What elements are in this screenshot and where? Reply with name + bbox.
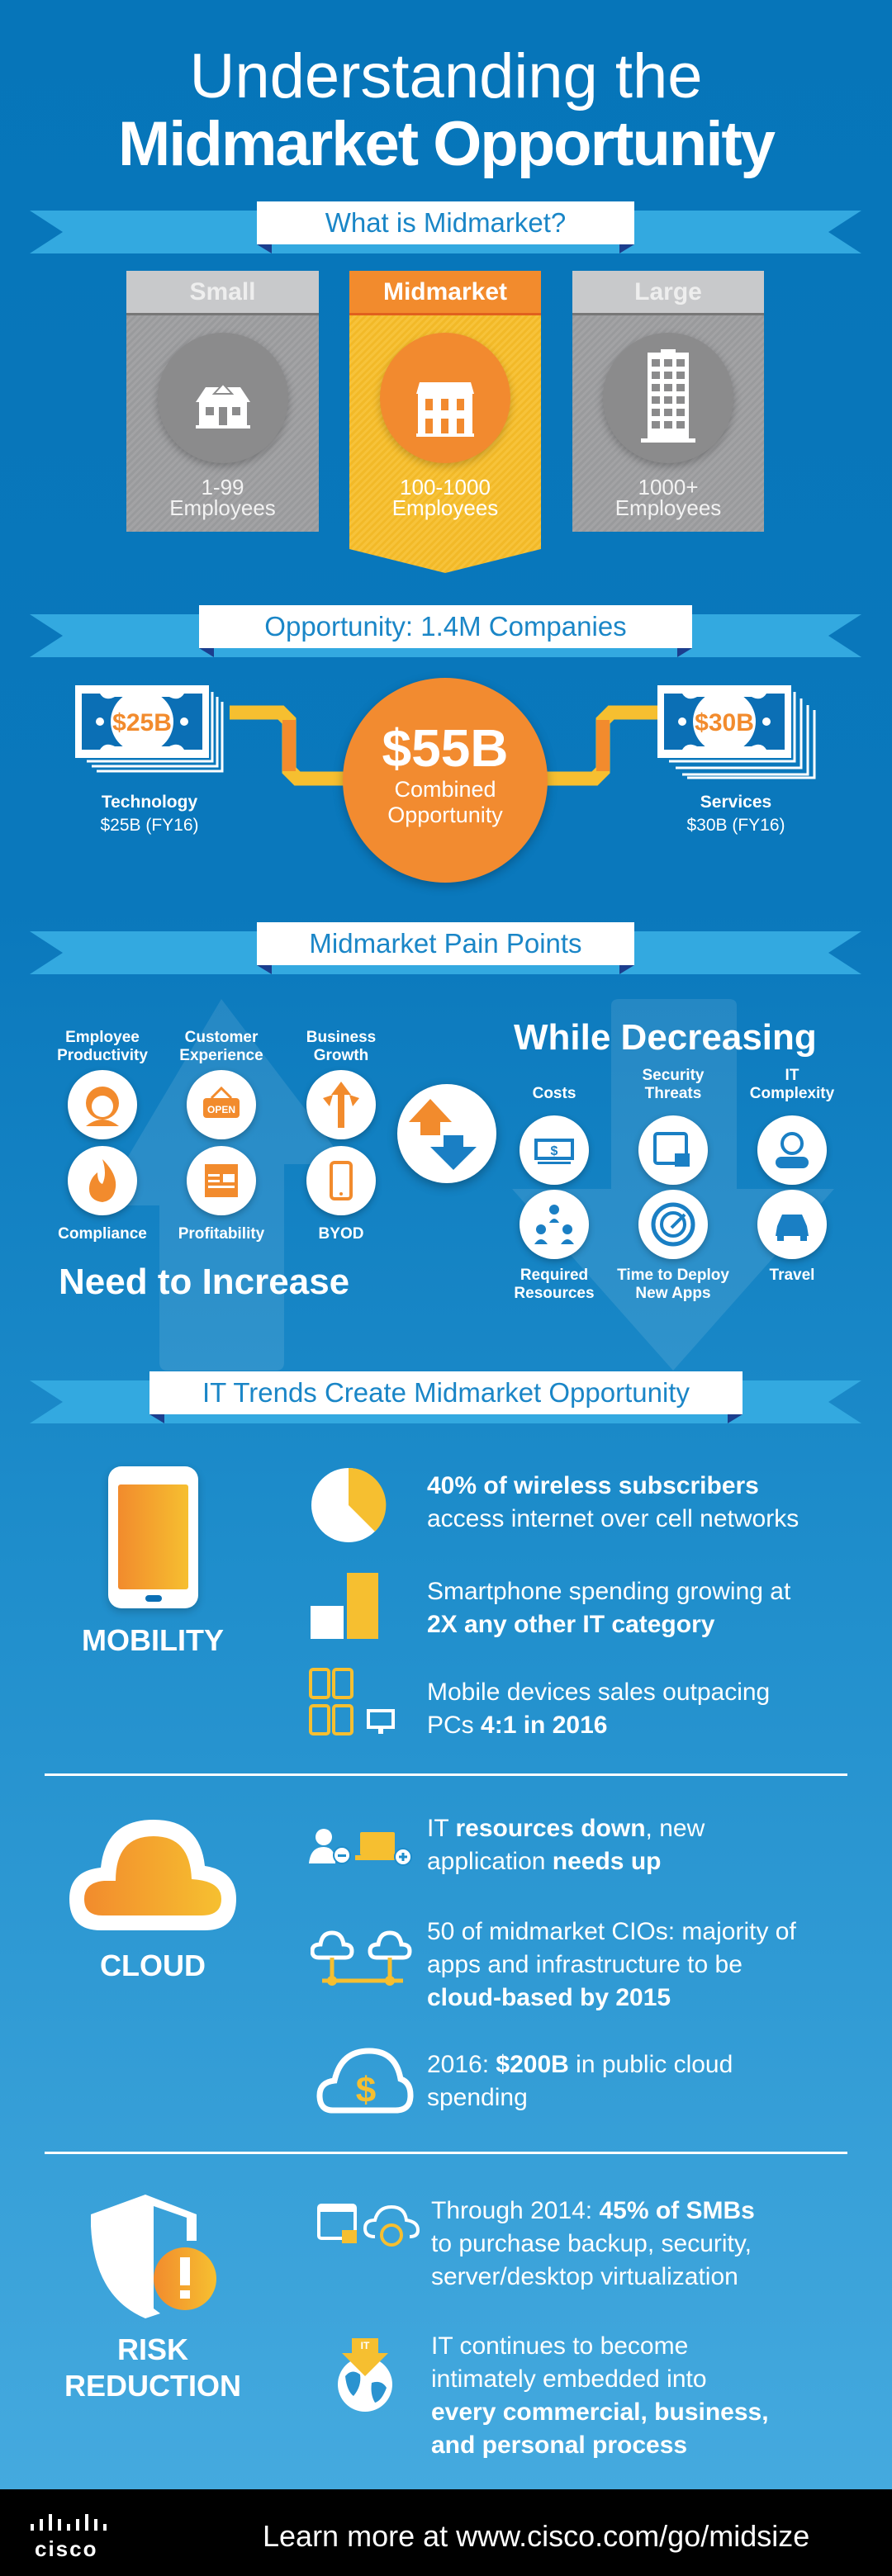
panel: decreasing icons: Complexity	[750, 1085, 834, 1102]
text: 50 of midmarket CIOs: cloud-based by 2015	[427, 1984, 671, 2011]
icon: globe IT: IT	[361, 2340, 370, 2351]
footer	[0, 2489, 892, 2576]
panel: large: Employees	[615, 495, 721, 520]
icon: employee	[68, 1070, 137, 1139]
circle: combined opportunity	[343, 678, 548, 883]
text: IT embedded: intimately embedded into	[431, 2365, 707, 2393]
icon: house	[158, 333, 288, 463]
panel: decreasing icons: IT	[785, 1067, 799, 1084]
panel: decreasing icons: Security	[643, 1067, 704, 1084]
heading: risk reduction: RISK	[117, 2332, 188, 2366]
text: services: $30B (FY16)	[686, 816, 785, 835]
icon: money stack 25B	[75, 685, 223, 773]
icon: money stack 30B: $30B	[695, 709, 754, 736]
icon: cloud	[69, 1820, 236, 1930]
text: smartphone spending	[427, 1578, 791, 1638]
icon: open sign: OPEN	[207, 1104, 235, 1115]
circle: combined opportunity: Combined	[394, 777, 496, 802]
heading: risk reduction	[64, 2332, 241, 2403]
icon: speedometer	[638, 1190, 708, 1259]
text: mobile devices: Mobile devices sales outpacing	[427, 1679, 770, 1706]
icon: costs	[520, 1115, 589, 1185]
logo: cisco: cisco	[35, 2536, 97, 2561]
text: services: Services	[700, 793, 771, 812]
icon: money stack 30B	[657, 685, 816, 779]
icon: dollar cloud: $	[356, 2070, 376, 2110]
panel: small: Small	[189, 278, 256, 305]
heading: while decreasing: While Decreasing	[514, 1017, 817, 1058]
connectors	[230, 705, 657, 786]
text: wireless: access internet over cell networks	[427, 1505, 799, 1532]
text: 2016 public cloud: 2016: $200B in public cloud	[427, 2051, 733, 2078]
panel: decreasing icons	[514, 1067, 834, 1302]
icon: travel car	[757, 1190, 827, 1259]
text: technology	[100, 793, 199, 835]
text: through 2014	[431, 2197, 755, 2290]
panel: decreasing icons: Resources	[514, 1285, 595, 1302]
panel: decreasing icons: Required	[520, 1267, 588, 1284]
text: wireless: 40% of wireless subscribers	[427, 1472, 759, 1499]
text: IT embedded	[431, 2332, 769, 2459]
icon: complexity	[757, 1115, 827, 1185]
panel: midmarket: 100-1000	[400, 475, 491, 500]
circle: combined opportunity: $55B	[382, 718, 509, 778]
icon: pie chart	[311, 1468, 387, 1542]
panel: need to increase: Customer	[185, 1029, 258, 1046]
icon: building	[380, 333, 510, 463]
text: mobile devices: PCs 4:1 in 2016	[427, 1712, 607, 1739]
text: learn more: Learn more at www.cisco.com/go/midsize	[263, 2519, 809, 2553]
icon: up/down arrow circle	[397, 1084, 496, 1183]
panel: large: 1000+	[638, 475, 699, 500]
arrow: faint up arrow	[127, 999, 834, 1371]
ribbon: what is midmarket: What is Midmarket?	[325, 207, 566, 238]
text: smartphone spending: 2X any other IT category	[427, 1611, 714, 1638]
icon: devices	[309, 1668, 395, 1735]
text: 2016 public cloud	[427, 2051, 733, 2111]
panel: decreasing icons: New Apps	[635, 1285, 711, 1302]
heading: need to increase: Need to Increase	[59, 1262, 349, 1302]
text: mobile devices	[427, 1679, 770, 1739]
icon: byod phone	[306, 1146, 376, 1215]
icon: security and backup	[317, 2204, 420, 2247]
icon: costs: $	[551, 1144, 558, 1158]
text: 50 of midmarket CIOs	[427, 1918, 796, 2011]
circle: combined opportunity: Opportunity	[387, 803, 503, 827]
panel: midmarket: Midmarket	[383, 278, 507, 305]
panel: large: Large	[634, 278, 702, 305]
panel: need to increase: Business	[306, 1029, 376, 1046]
icon: connected clouds	[311, 1930, 411, 1986]
icon: skyscraper	[603, 333, 733, 463]
text: IT resources: IT resources down, new	[427, 1815, 705, 1842]
panel: small: Employees	[169, 495, 276, 520]
panel: small	[126, 271, 319, 532]
panel: midmarket	[349, 271, 541, 573]
panel: need to increase: BYOD	[319, 1225, 363, 1243]
text: 50 of midmarket CIOs: 50 of midmarket CIOs: majority of	[427, 1918, 796, 1945]
panel: need to increase	[57, 1029, 378, 1243]
text: wireless	[427, 1472, 799, 1532]
heading: risk reduction: REDUCTION	[64, 2369, 241, 2403]
text: smartphone spending: Smartphone spending growing at	[427, 1578, 790, 1605]
text: services	[686, 793, 785, 835]
text: IT embedded: every commercial, business,	[431, 2398, 769, 2426]
panel: need to increase: Employee	[65, 1029, 140, 1046]
icon: security	[638, 1115, 708, 1185]
icon: money stack 25B: $25B	[112, 709, 172, 736]
ribbon: pain points: Midmarket Pain Points	[309, 928, 582, 959]
ribbon: pain points	[30, 922, 861, 974]
title: Understanding the	[189, 41, 703, 111]
panel: midmarket: Employees	[392, 495, 498, 520]
text: through 2014: Through 2014: 45% of SMBs	[431, 2197, 755, 2224]
icon: compliance flame	[68, 1146, 137, 1215]
title: Midmarket Opportunity	[118, 109, 774, 179]
ribbon: opportunity	[30, 605, 861, 657]
text: through 2014: to purchase backup, security,	[431, 2230, 752, 2257]
icon: open sign	[187, 1070, 256, 1139]
panel: need to increase: Productivity	[57, 1047, 148, 1064]
icon: globe IT	[338, 2338, 392, 2412]
icon: newspaper	[187, 1146, 256, 1215]
panel: decreasing icons: Threats	[645, 1085, 701, 1102]
ribbon: opportunity: Opportunity: 1.4M Companies	[264, 611, 627, 642]
text: through 2014: server/desktop virtualization	[431, 2263, 738, 2290]
icon: resources	[520, 1190, 589, 1259]
heading: cloud: CLOUD	[100, 1949, 206, 1982]
ribbon: IT trends	[30, 1371, 861, 1423]
panel: need to increase: Growth	[314, 1047, 368, 1064]
text: IT resources	[427, 1815, 705, 1875]
panel: decreasing icons: Travel	[770, 1267, 814, 1284]
text: IT embedded: and personal process	[431, 2432, 687, 2459]
text: technology: $25B (FY16)	[100, 816, 199, 835]
icon: mobile phone	[108, 1466, 198, 1608]
text: IT embedded: IT continues to become	[431, 2332, 688, 2360]
text: 2016 public cloud: spending	[427, 2084, 528, 2111]
panel: need to increase: Profitability	[178, 1225, 264, 1243]
ribbon: what is midmarket	[30, 201, 861, 253]
icon: resources down	[309, 1829, 412, 1866]
title	[118, 41, 776, 179]
logo: cisco	[31, 2514, 107, 2561]
icon: growth arrows	[306, 1070, 376, 1139]
panel: need to increase: Compliance	[58, 1225, 147, 1243]
icon: shield	[91, 2195, 216, 2318]
panel: small: 1-99	[201, 475, 244, 500]
text: technology: Technology	[102, 793, 197, 812]
heading: mobility: MOBILITY	[82, 1623, 224, 1657]
icon: bar chart	[311, 1573, 378, 1639]
panel: decreasing icons: Time to Deploy	[617, 1267, 729, 1284]
ribbon: IT trends: IT Trends Create Midmarket Opportunity	[202, 1377, 690, 1408]
panel: need to increase: Experience	[179, 1047, 263, 1064]
text: 50 of midmarket CIOs: apps and infrastructure to be	[427, 1951, 743, 1978]
panel: decreasing icons: Costs	[533, 1085, 576, 1102]
text: IT resources: application needs up	[427, 1848, 661, 1875]
panel: large	[572, 271, 764, 532]
icon: dollar cloud	[317, 2048, 413, 2114]
